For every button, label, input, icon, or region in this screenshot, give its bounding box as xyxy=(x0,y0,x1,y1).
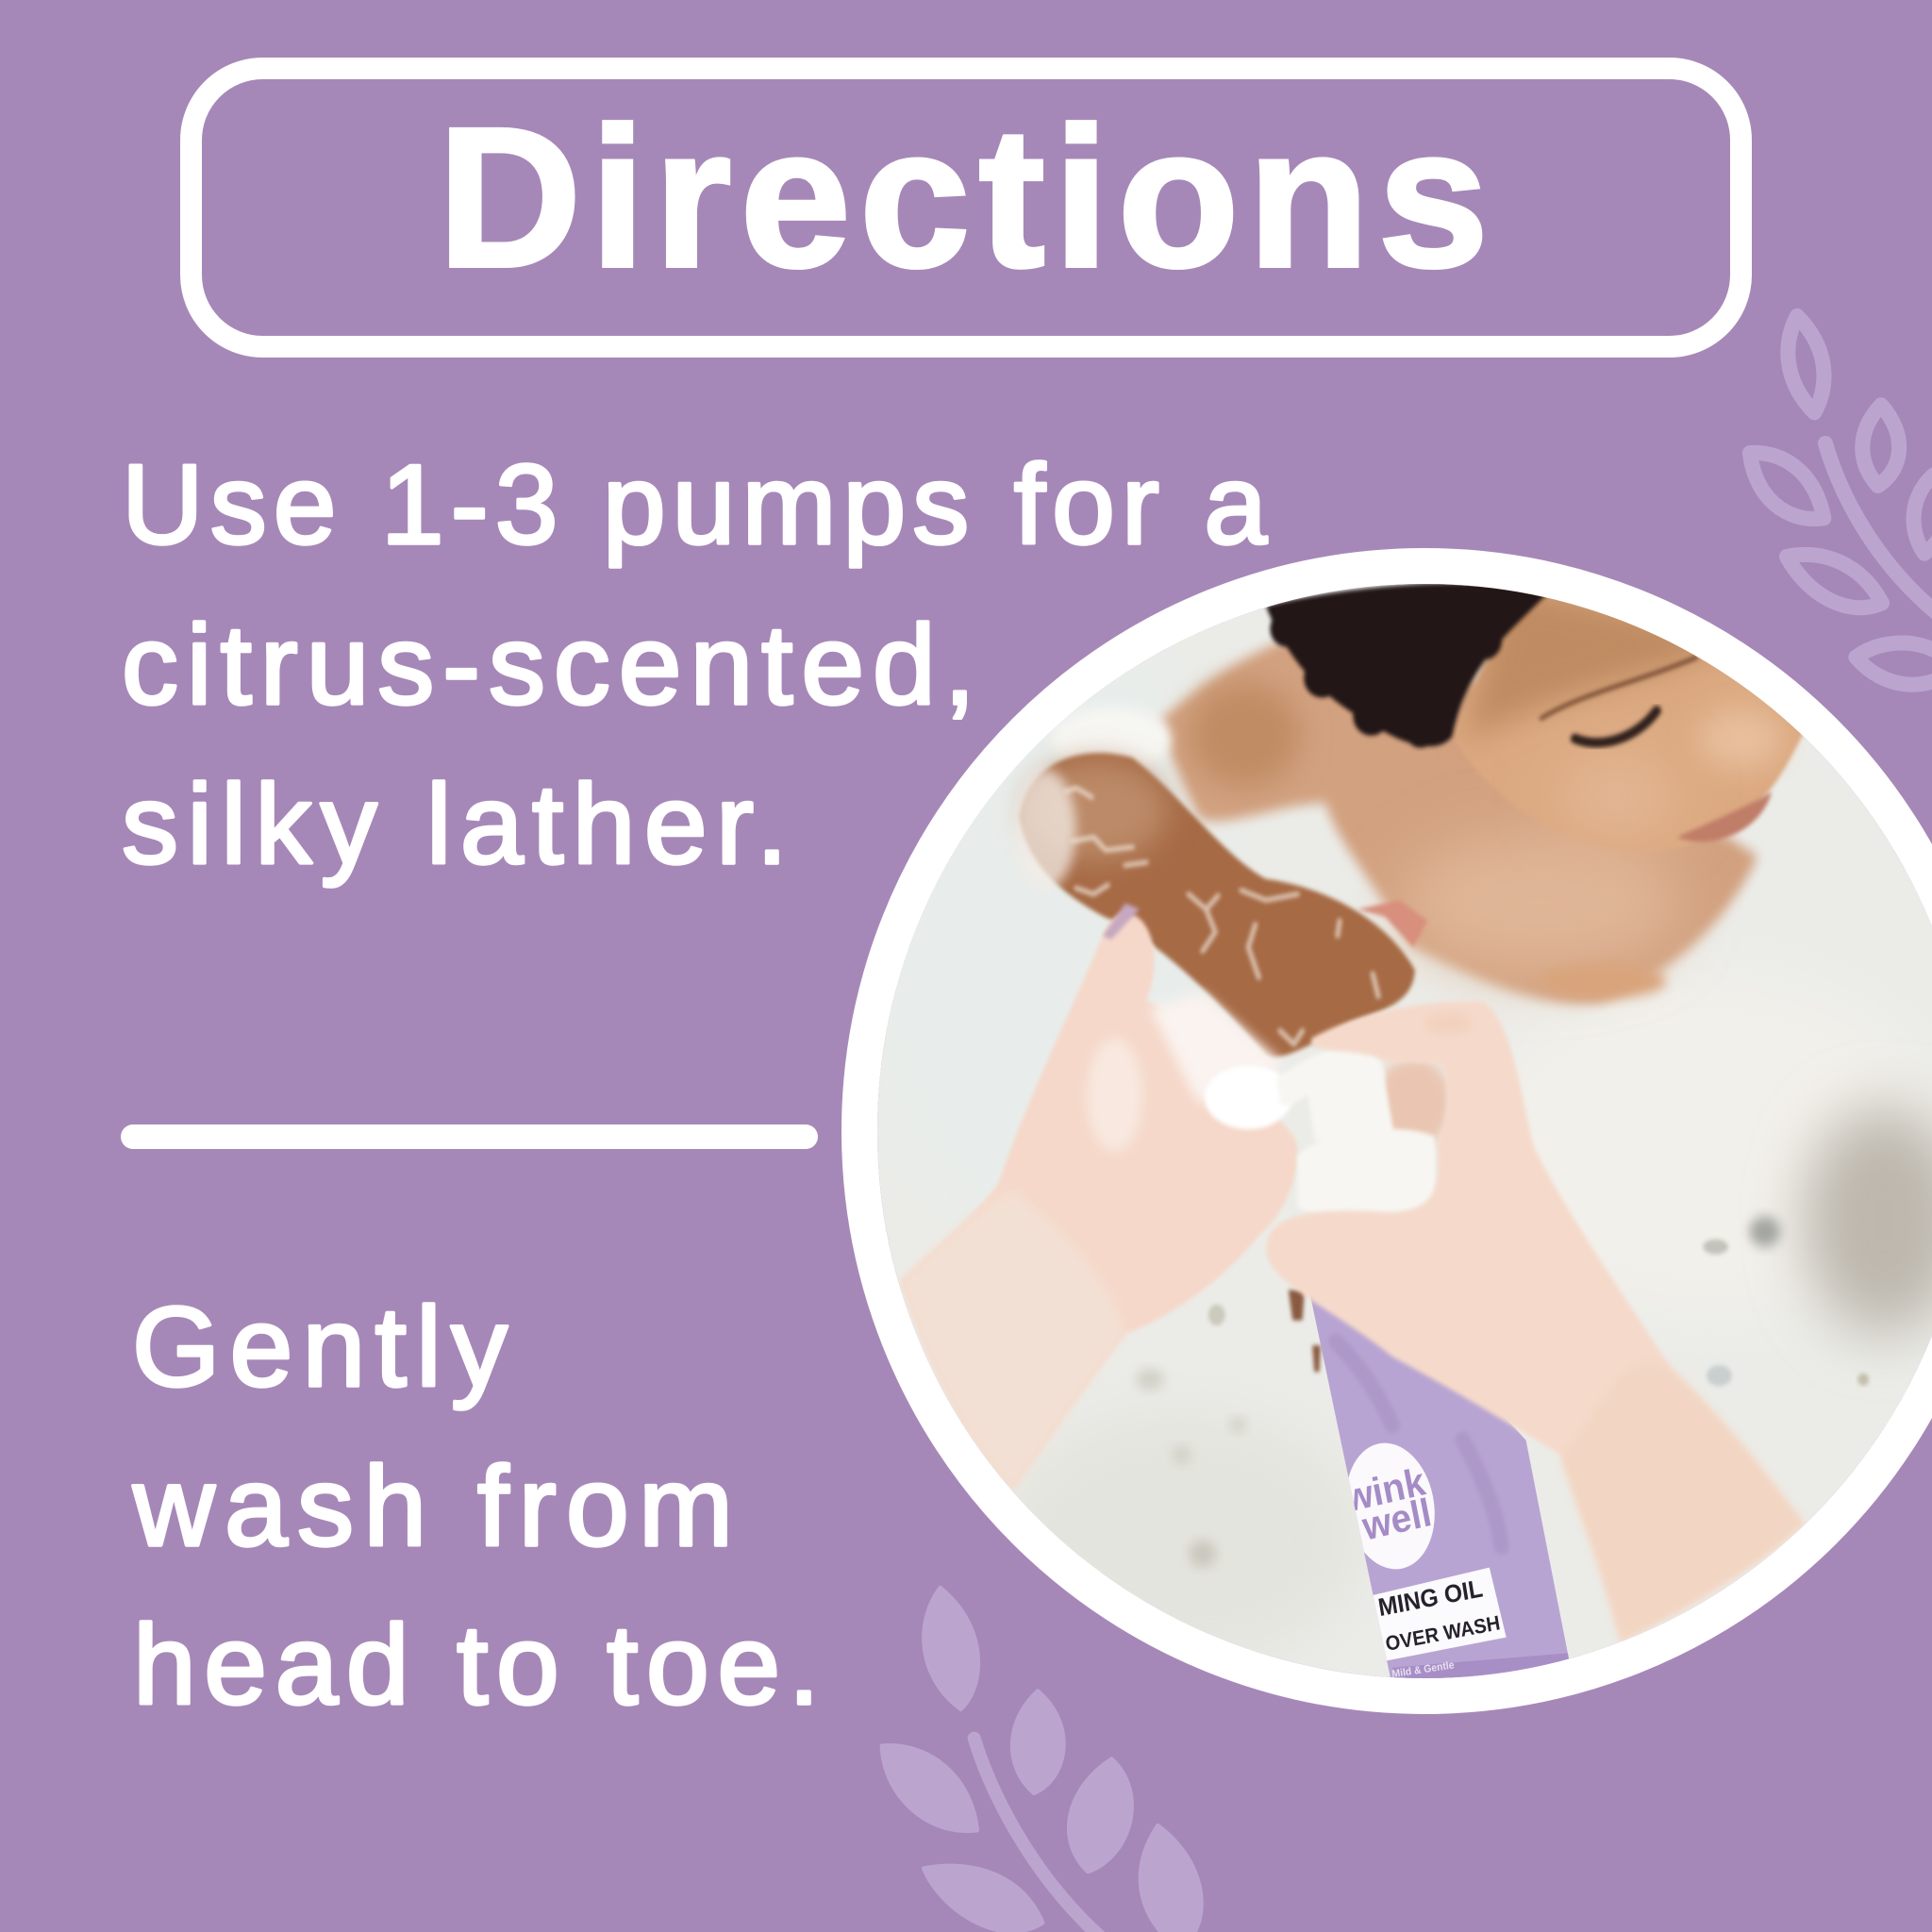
child's torso and shoulder xyxy=(1160,632,1757,1004)
product label: Mild & Gentle xyxy=(1391,1659,1455,1680)
child's hair xyxy=(1266,583,1551,748)
product label: MING OIL xyxy=(1376,1575,1485,1622)
title box: Directions xyxy=(191,68,1741,347)
product label: OVER WASH xyxy=(1384,1612,1502,1656)
adult right hand xyxy=(1266,1001,1804,1641)
text block: step two xyxy=(132,1284,820,1728)
text block: step one: citrus-scented, xyxy=(122,602,975,728)
text block: step one xyxy=(122,441,1267,888)
child's arm and hand with soap xyxy=(1013,707,1427,1058)
title box: Directions: Directions xyxy=(438,86,1489,308)
white ring around photo xyxy=(859,566,1932,1696)
product logo xyxy=(1349,1443,1435,1570)
text block: step one: Use 1-3 pumps for a xyxy=(122,441,1267,568)
text block: step one: silky lather. xyxy=(122,761,788,888)
text block: step two: wash from xyxy=(132,1443,733,1570)
foam bottle with label xyxy=(1311,1297,1569,1678)
palm shadow behind pump xyxy=(1383,1061,1448,1143)
child's fingers behind bottle xyxy=(1289,1290,1321,1372)
text block: step two: Gently xyxy=(132,1284,508,1410)
bottle pump xyxy=(1276,1047,1436,1217)
foam background xyxy=(877,584,1932,1678)
adult left hand with foam xyxy=(900,903,1298,1490)
icon: outlined leaf sprig, top right xyxy=(1750,316,1932,685)
icon: filled leaf sprig, bottom centre xyxy=(882,1588,1201,1932)
product logo: well xyxy=(1358,1491,1435,1549)
divider bar xyxy=(121,1124,818,1149)
product label xyxy=(1372,1568,1507,1680)
child's face xyxy=(1462,589,1805,848)
product logo: wink xyxy=(1340,1459,1429,1521)
text block: step two: head to toe. xyxy=(133,1602,820,1728)
photo: adult hands pumping foam wash for a child in the bath xyxy=(877,584,1932,1678)
